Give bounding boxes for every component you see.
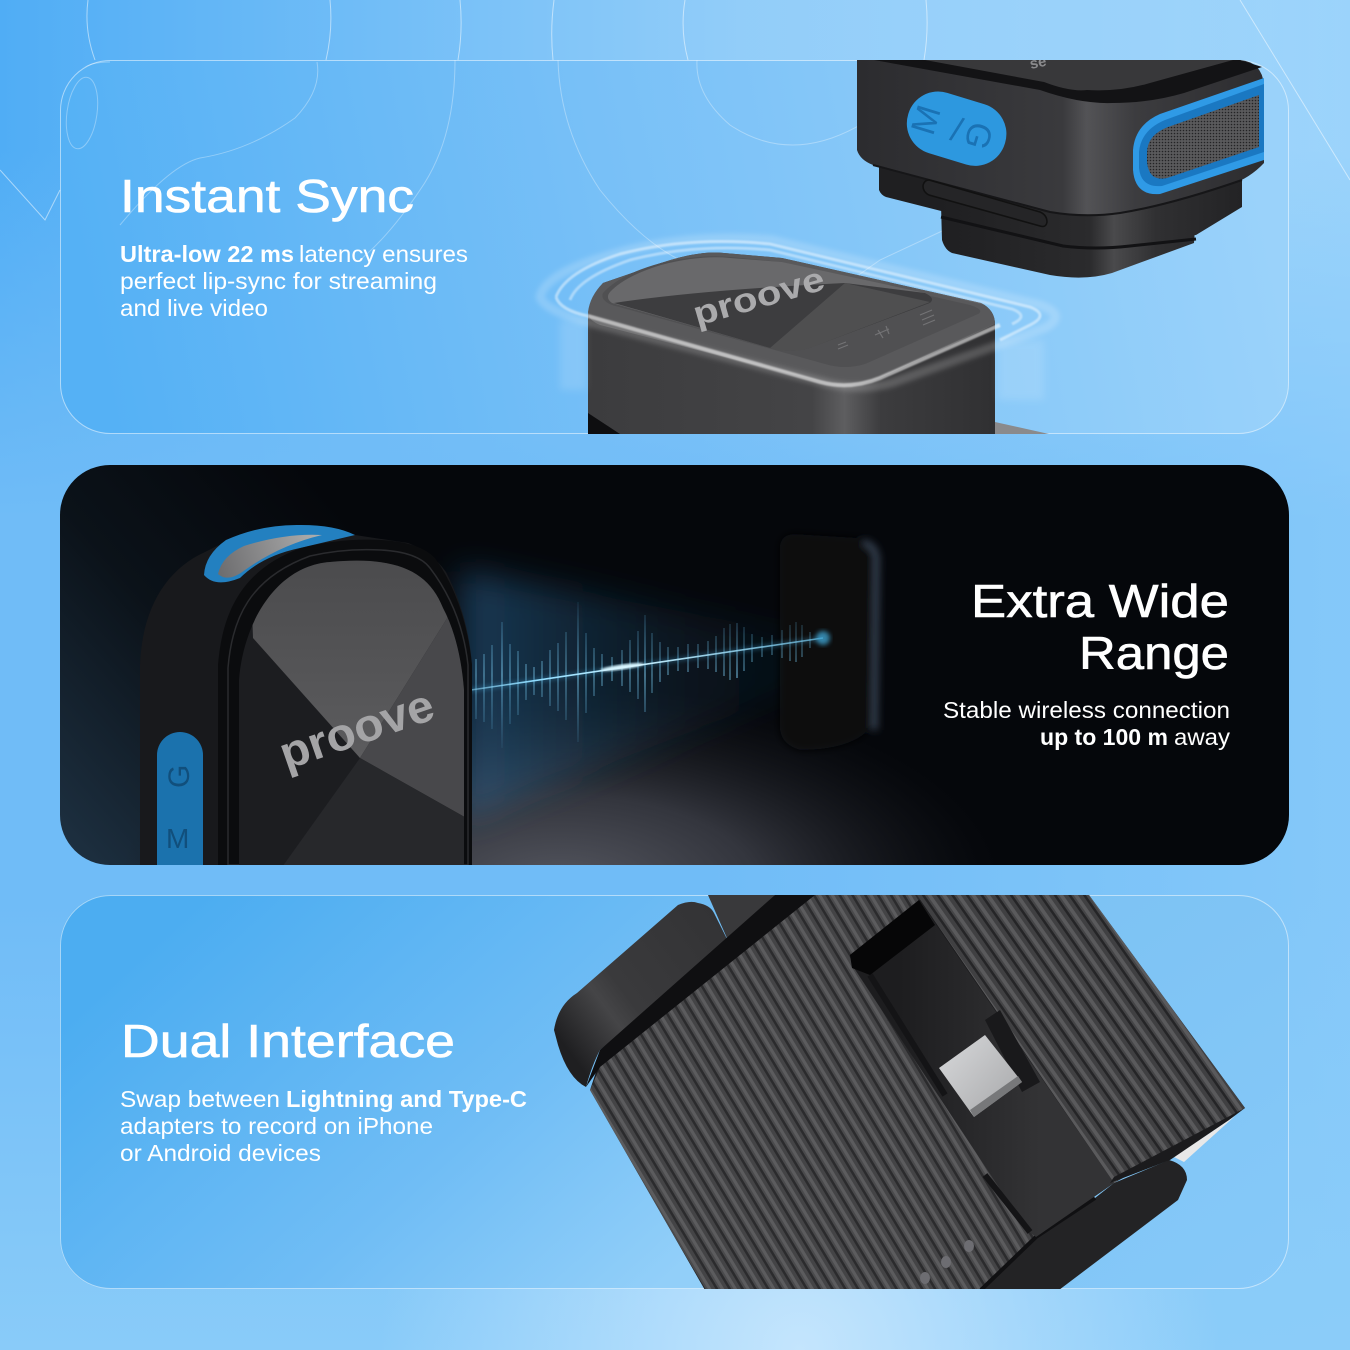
panel: extra wide range xyxy=(60,465,1289,865)
end collar xyxy=(554,902,730,1087)
dark backing silhouette xyxy=(590,895,1245,1290)
text block: interface description: or Android devices xyxy=(120,1140,321,1166)
sound wave xyxy=(472,602,833,748)
signal beam xyxy=(460,570,823,820)
heading: dual interface: Dual Interface xyxy=(121,1015,455,1067)
side button: G xyxy=(163,765,196,788)
device: top microphone xyxy=(857,53,1264,278)
seam xyxy=(586,895,815,1087)
second cap xyxy=(708,895,775,938)
usb-c connector xyxy=(939,1010,1040,1117)
heading: extra wide range: Range xyxy=(1079,627,1229,679)
text block: instant sync description: perfect lip-sync for streaming xyxy=(120,268,437,294)
text block: interface description: Swap between xyxy=(120,1086,280,1112)
panel right tint xyxy=(1062,895,1289,1288)
ribbed body xyxy=(590,895,1036,1290)
indicator dots xyxy=(920,1240,974,1284)
blue button xyxy=(906,92,1006,166)
text block: instant sync description: Ultra-low 22 ms xyxy=(120,241,294,267)
foot xyxy=(981,1160,1187,1290)
lowest block xyxy=(941,205,1196,278)
text block: instant sync description: latency ensures xyxy=(299,241,468,267)
text block: range description: Stable wireless connection xyxy=(943,697,1230,723)
blue button: M xyxy=(904,101,949,139)
ribbed slab xyxy=(917,895,1245,1183)
front frame xyxy=(218,540,472,865)
text block: instant sync description: and live video xyxy=(120,295,268,321)
device group xyxy=(540,53,1264,434)
floor glow xyxy=(472,728,925,865)
panel card xyxy=(60,60,1288,434)
blue button: G xyxy=(956,118,1000,154)
blue button: / xyxy=(947,111,967,150)
text block: instant sync description xyxy=(120,241,468,321)
side button xyxy=(157,732,203,865)
text block: interface description: adapters to record on iPhone xyxy=(120,1113,433,1139)
device: ribbed receiver xyxy=(554,895,1245,1290)
mesh grille xyxy=(1133,78,1264,194)
side button: M xyxy=(166,823,189,854)
connector channel xyxy=(850,900,1114,1237)
panel card xyxy=(60,895,1289,1289)
text block: range description xyxy=(943,697,1231,750)
device: lower microphone xyxy=(588,252,1049,434)
top recess xyxy=(874,60,1262,103)
upper block xyxy=(857,60,1264,215)
heading: instant sync: Instant Sync xyxy=(120,170,414,222)
indicators xyxy=(838,310,935,349)
text block: interface description: Lightning and Type-C xyxy=(286,1086,527,1112)
panel card xyxy=(60,465,1289,865)
middle block xyxy=(879,168,1242,236)
logo: proove xyxy=(689,260,829,334)
groove xyxy=(923,180,1047,226)
text block: interface description xyxy=(120,1086,527,1166)
panel border xyxy=(60,896,1288,1288)
text block: range description: away xyxy=(1174,724,1231,750)
logo fragment: se xyxy=(1028,53,1048,73)
panel: instant sync xyxy=(60,53,1288,434)
logo: proove xyxy=(272,678,441,779)
heading: extra wide range: Extra Wide xyxy=(971,575,1229,627)
text block: range description: up to 100 m xyxy=(1040,724,1168,750)
sound wave rings xyxy=(540,238,1055,387)
scene xyxy=(140,525,925,865)
heading: extra wide range xyxy=(971,575,1229,679)
device: front microphone xyxy=(140,525,472,865)
glass face xyxy=(239,560,464,865)
panel: dual interface xyxy=(60,895,1289,1290)
vertical wave glow xyxy=(560,320,1044,400)
logo pad xyxy=(608,257,922,339)
phone xyxy=(780,534,878,750)
mesh grille xyxy=(204,525,355,582)
slab end light xyxy=(1174,1116,1235,1162)
decorative contour lines xyxy=(66,60,942,276)
